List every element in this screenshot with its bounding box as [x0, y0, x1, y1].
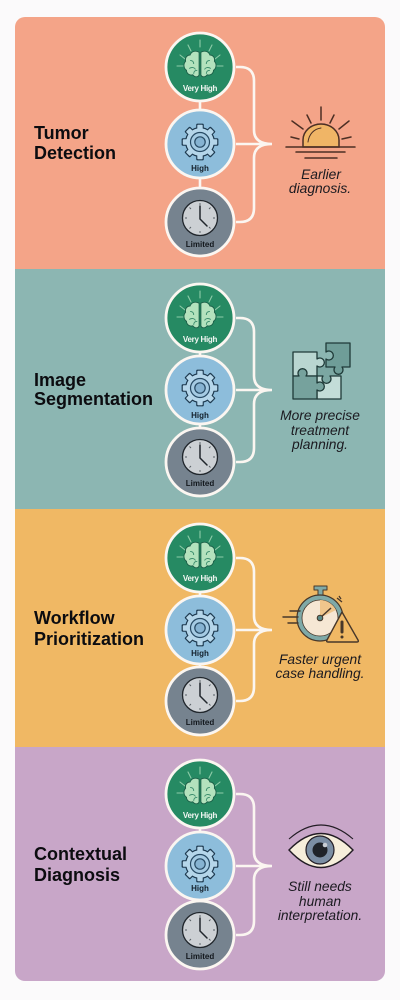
- caption: more precise treatment planning: More precise: [280, 408, 360, 423]
- circle: high: [166, 596, 234, 664]
- heading: contextual diagnosis: Diagnosis: [34, 865, 120, 885]
- caption: faster urgent case handling: case handling.: [276, 666, 364, 681]
- circle: high: [166, 356, 234, 424]
- heading: contextual diagnosis: Contextual: [34, 844, 127, 864]
- caption: still needs human interpretation: Still needs: [288, 879, 352, 894]
- icon: sunrise: [286, 107, 355, 158]
- circle: high: High: [191, 411, 209, 420]
- panel: tumor detection: [15, 17, 385, 269]
- heading: workflow prioritization: Prioritization: [34, 629, 144, 649]
- circle: high: [166, 110, 234, 178]
- heading: image segmentation: Image: [34, 370, 86, 390]
- circle: limited: Limited: [186, 718, 214, 727]
- bracket connector: [200, 67, 272, 222]
- circle: limited: Limited: [186, 952, 214, 961]
- caption: more precise treatment planning: planning.: [291, 437, 348, 452]
- caption: earlier diagnosis: diagnosis.: [289, 181, 351, 196]
- panel: workflow prioritization: [15, 509, 385, 747]
- heading: tumor detection: Detection: [34, 143, 116, 163]
- circle: very high: Very High: [183, 574, 218, 583]
- circle: limited: Limited: [186, 479, 214, 488]
- circle: very high: Very High: [183, 84, 218, 93]
- panel: contextual diagnosis: [15, 747, 385, 981]
- caption: still needs human interpretation: human: [299, 894, 341, 909]
- circle: very high: [166, 284, 234, 352]
- caption: faster urgent case handling: Faster urgent: [279, 652, 362, 667]
- bracket connector: [200, 794, 272, 935]
- caption: earlier diagnosis: Earlier: [301, 167, 342, 182]
- icon: eye: [289, 825, 353, 868]
- circle: high: [166, 832, 234, 900]
- heading: tumor detection: Tumor: [34, 123, 89, 143]
- circle: limited: Limited: [186, 240, 214, 249]
- circle: very high: Very High: [183, 811, 218, 820]
- circle: high: High: [191, 884, 209, 893]
- caption: more precise treatment planning: treatment: [291, 423, 350, 438]
- circle: high: High: [191, 164, 209, 173]
- icon: stopwatch with warning: [283, 586, 358, 642]
- caption: still needs human interpretation: interpretation.: [278, 908, 362, 923]
- circle: high: High: [191, 649, 209, 658]
- heading: image segmentation: Segmentation: [34, 389, 153, 409]
- circle: very high: Very High: [183, 335, 218, 344]
- circle: very high: [166, 524, 234, 592]
- bracket connector: [200, 558, 272, 701]
- circle: limited: [166, 901, 234, 969]
- panel: image segmentation: [15, 269, 385, 509]
- circle: limited: [166, 428, 234, 496]
- heading: workflow prioritization: Workflow: [34, 608, 116, 628]
- circle: very high: [166, 33, 234, 101]
- icon: puzzle: [293, 343, 350, 399]
- circle: limited: [166, 667, 234, 735]
- circle: limited: [166, 188, 234, 256]
- bracket connector: [200, 318, 272, 462]
- circle: very high: [166, 760, 234, 828]
